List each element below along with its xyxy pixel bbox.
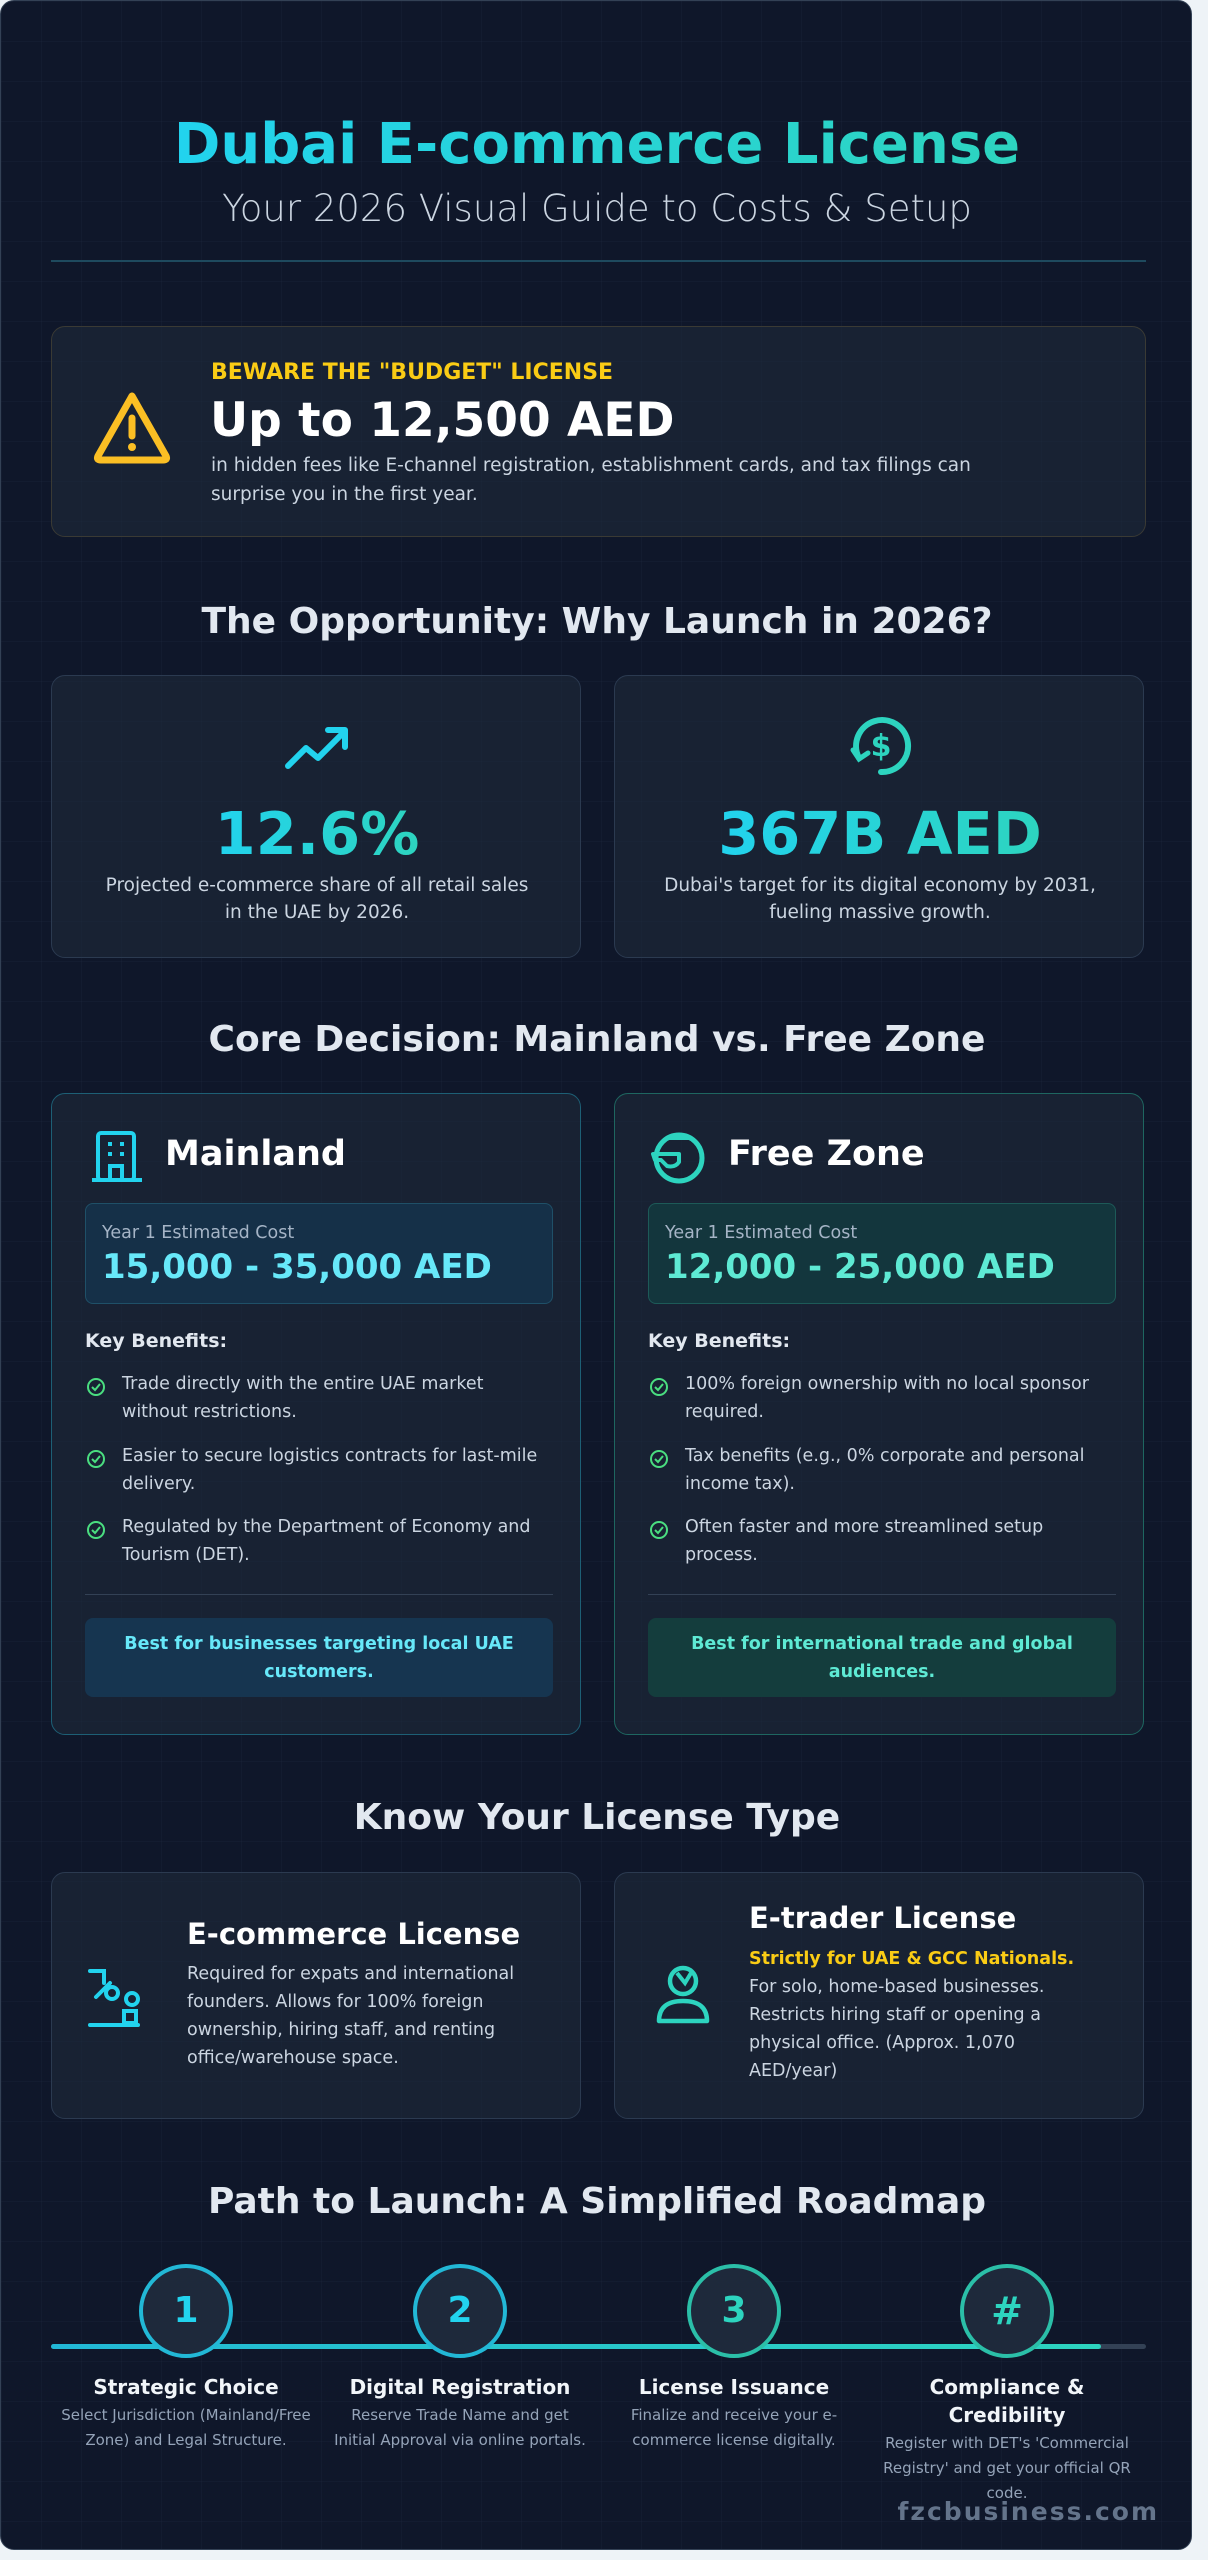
cost box: Year 1 Estimated Cost <box>665 1223 857 1243</box>
icon: trending up <box>285 727 348 769</box>
step 4 circle: hash icon <box>960 2264 1054 2358</box>
cost box: 12,000 - 25,000 AED <box>665 1247 1055 1287</box>
benefits heading: Key Benefits: <box>648 1330 790 1352</box>
stat number: 12.6% <box>215 799 419 868</box>
heading: core decision: Core Decision: Mainland vs. Free Zone <box>209 1019 985 1060</box>
benefit list: 100% foreign ownership with no local sponsor required. <box>685 1374 1089 1422</box>
license text: Required for expats and international founders. Allows for 100% foreign ownership, hiring staff, and renting office/warehouse space. <box>187 1964 514 2068</box>
cost box <box>648 1203 1116 1304</box>
best-for callout <box>648 1618 1116 1697</box>
icon: warning <box>94 392 170 464</box>
warning text: in hidden fees like E-channel registration, establishment cards, and tax filings can surprise you in the first year. <box>211 455 971 505</box>
card title: Free Zone <box>728 1134 925 1174</box>
icon: person <box>656 1966 710 2024</box>
step 3 circle: 3 <box>721 2290 747 2331</box>
cost box: 15,000 - 35,000 AED <box>102 1247 492 1287</box>
step 1 <box>61 2375 311 2449</box>
panel: e-commerce license <box>51 1872 581 2119</box>
best-for callout: Best for international trade and global audiences. <box>691 1634 1073 1682</box>
benefit list: Easier to secure logistics contracts for last-mile delivery. <box>122 1446 537 1494</box>
stat text: Dubai's target for its digital economy by 2031, fueling massive growth. <box>664 875 1096 923</box>
step 1 circle <box>139 2264 233 2358</box>
step 2 circle <box>413 2264 507 2358</box>
best-for callout <box>85 1618 553 1697</box>
stat number: 367B AED <box>718 799 1042 868</box>
cost box: Year 1 Estimated Cost <box>102 1223 294 1243</box>
step 1 circle: 1 <box>173 2290 199 2331</box>
subtitle: Your 2026 Visual Guide to Costs & Setup <box>222 187 972 230</box>
warning amount: Up to 12,500 AED <box>210 393 675 448</box>
benefit list: Trade directly with the entire UAE market without restrictions. <box>122 1374 483 1422</box>
heading: opportunity: The Opportunity: Why Launch in 2026? <box>201 601 993 642</box>
step 3 circle <box>687 2264 781 2358</box>
step 4 <box>883 2375 1131 2502</box>
panel: free zone <box>614 1093 1144 1735</box>
step 3: Finalize and receive your e-commerce license digitally. <box>631 2406 837 2449</box>
icon: digital money <box>850 717 912 775</box>
step 4: Register with DET's 'Commercial Registry' and get your official QR code. <box>883 2434 1131 2502</box>
title: Dubai E-commerce License <box>174 112 1020 177</box>
panel: warning <box>51 326 1146 537</box>
benefit list <box>87 1374 537 1565</box>
panel: stat 12.6% <box>51 675 581 958</box>
license text: Strictly for UAE & GCC Nationals. <box>749 1949 1074 1969</box>
benefit list: Regulated by the Department of Economy and Tourism (DET). <box>122 1517 530 1565</box>
step 3 <box>631 2375 837 2449</box>
panel: stat 367B <box>614 675 1144 958</box>
stat text: Projected e-commerce share of all retail sales in the UAE by 2026. <box>106 875 528 923</box>
step 3: License Issuance <box>639 2375 829 2399</box>
step 2: Digital Registration <box>350 2375 570 2399</box>
step 4: Compliance & Credibility <box>930 2375 1084 2427</box>
cost box <box>85 1203 553 1304</box>
step 2 circle: 2 <box>447 2290 473 2331</box>
icon: globe <box>650 1132 704 1184</box>
warning label: BEWARE THE "BUDGET" LICENSE <box>211 360 613 385</box>
benefit list: Often faster and more streamlined setup process. <box>685 1517 1043 1565</box>
heading: license type: Know Your License Type <box>354 1797 840 1838</box>
benefit list <box>650 1374 1089 1565</box>
license text: For solo, home-based businesses. Restricts hiring staff or opening a physical office. (Approx. 1,070 AED/year) <box>749 1977 1044 2081</box>
roadmap timeline <box>51 2344 1146 2349</box>
card title: Mainland <box>165 1134 346 1174</box>
footer brand: fzcbusiness.com <box>898 2497 1159 2526</box>
benefit list: Tax benefits (e.g., 0% corporate and personal income tax). <box>685 1446 1085 1494</box>
benefits heading: Key Benefits: <box>85 1330 227 1352</box>
step 2: Reserve Trade Name and get Initial Approval via online portals. <box>334 2406 586 2449</box>
step 1: Strategic Choice <box>93 2375 279 2399</box>
step 2 <box>334 2375 586 2449</box>
icon: founder <box>88 1969 140 2027</box>
best-for callout: Best for businesses targeting local UAE customers. <box>124 1634 514 1682</box>
step 4 circle: hash icon: # <box>991 2289 1023 2333</box>
panel: e-trader license <box>614 1872 1144 2119</box>
panel: mainland <box>51 1093 581 1735</box>
icon: digital money: $ <box>871 729 891 764</box>
icon: building <box>92 1131 142 1182</box>
heading: roadmap: Path to Launch: A Simplified Roadmap <box>208 2181 986 2222</box>
license title: E-trader License <box>749 1901 1016 1935</box>
license title: E-commerce License <box>187 1917 520 1951</box>
step 1: Select Jurisdiction (Mainland/Free Zone) and Legal Structure. <box>61 2406 311 2449</box>
